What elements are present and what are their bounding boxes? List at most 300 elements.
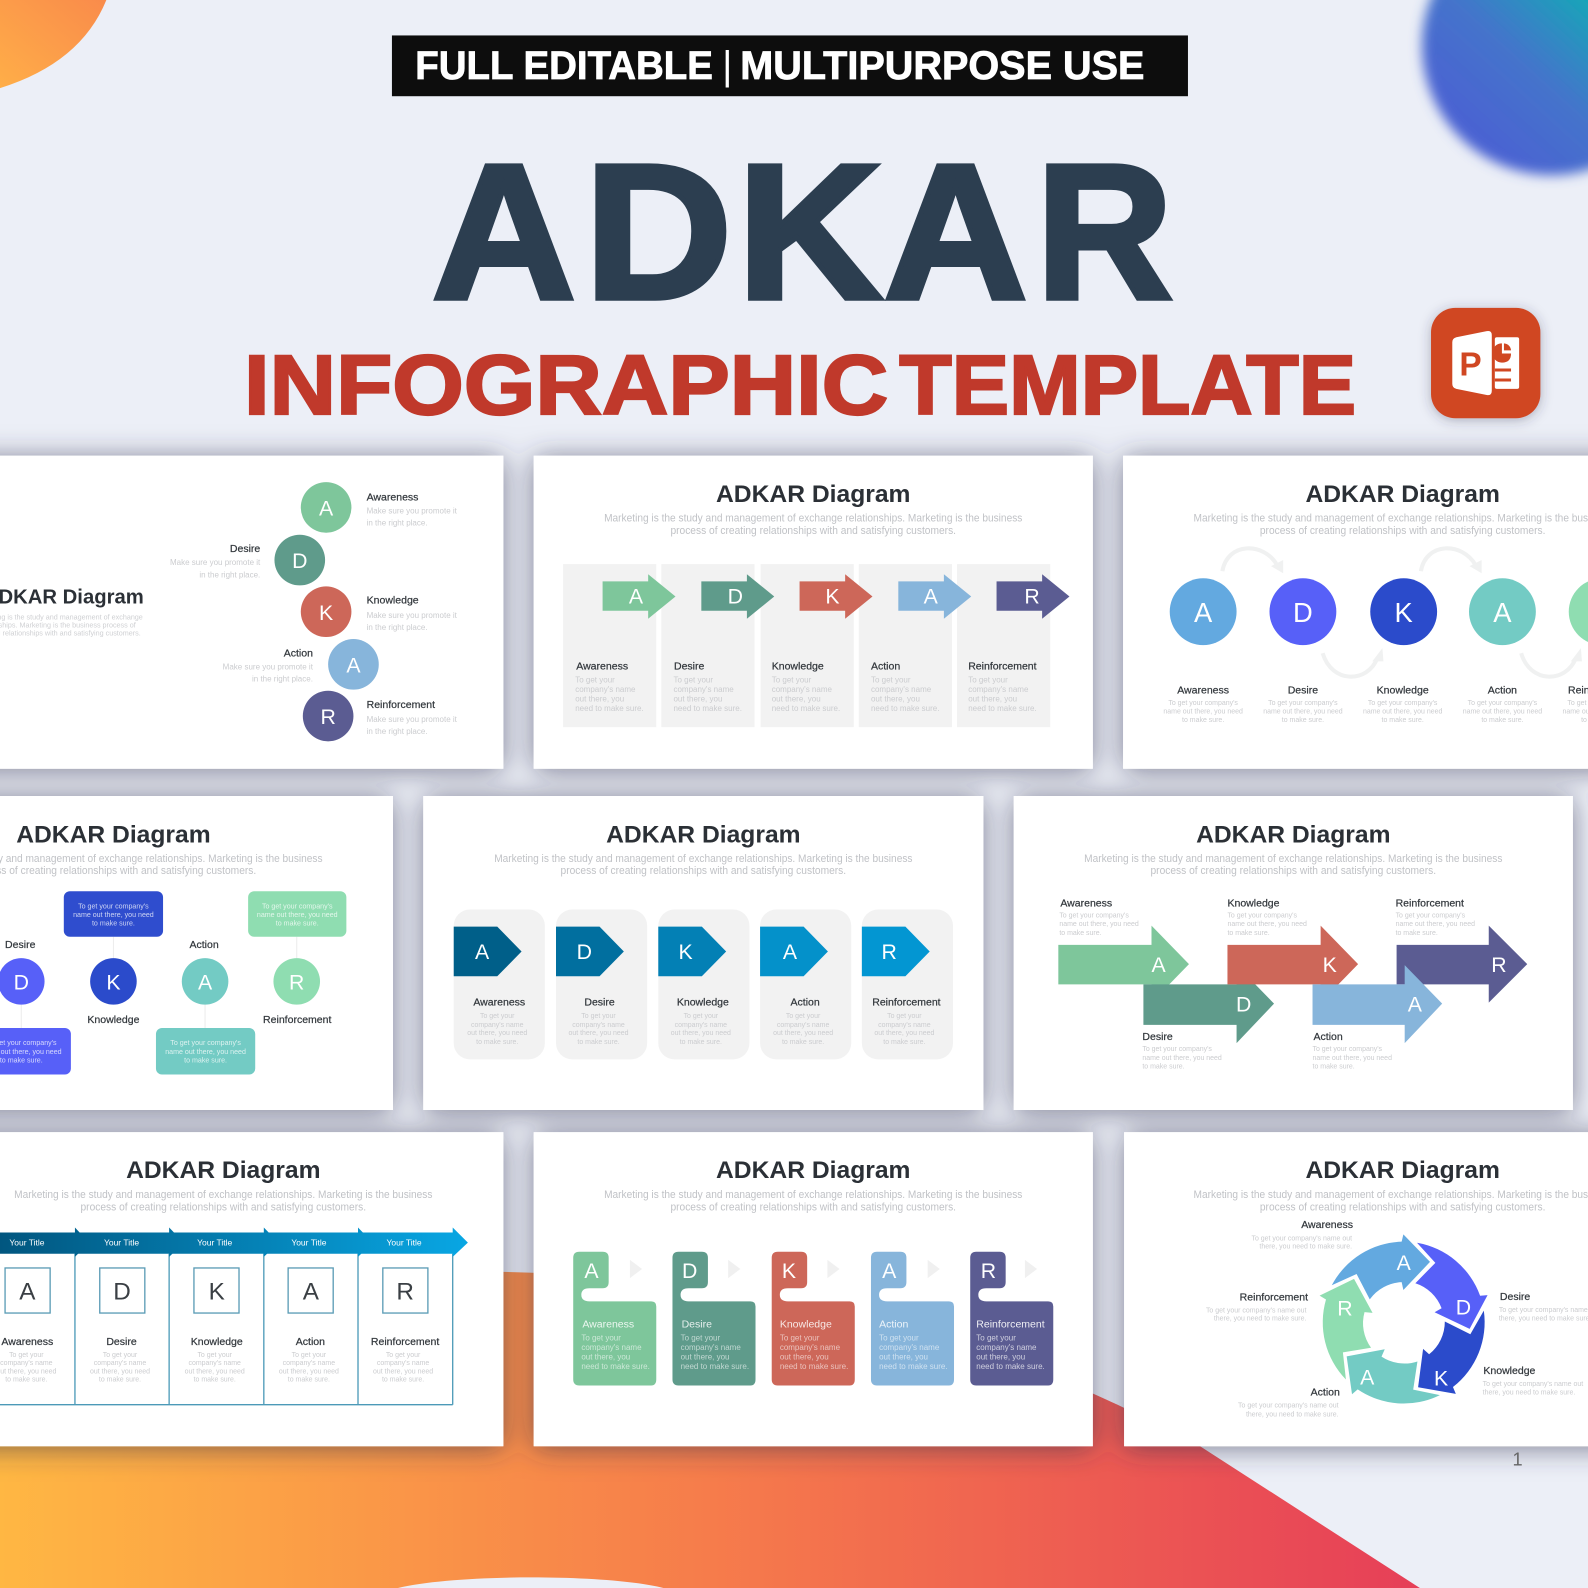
column text Awareness: To get your: [575, 676, 615, 685]
intro text: Marketing is the study and management of exchange relationships. Marketing is the business: [494, 853, 912, 865]
label Desire: [1499, 1291, 1588, 1323]
label Knowledge: Knowledge: [1377, 685, 1429, 697]
tabbed card D: D: [682, 1259, 697, 1283]
card text Action: to make sure.: [782, 1039, 824, 1046]
column text Awareness: [575, 660, 644, 713]
column text Action: need to make sure.: [871, 704, 939, 713]
tabbed card D: Desire: [682, 1319, 712, 1331]
label Action: Action: [1311, 1387, 1340, 1399]
column text Knowledge: Knowledge: [191, 1336, 243, 1348]
column text Awareness: need to make sure.: [575, 704, 644, 713]
arrow A: [603, 574, 676, 619]
tabbed card D: To get your: [681, 1333, 720, 1342]
letter box K: [194, 1268, 239, 1313]
label Action: there, you need to make sure.: [1246, 1412, 1339, 1419]
label Desire: Make sure you promote it: [170, 558, 261, 567]
header arrow 4: [263, 1227, 373, 1257]
letter box D: D: [113, 1278, 131, 1305]
column text Knowledge: out there, you: [772, 694, 821, 703]
slide shadows: [0, 456, 1588, 1446]
label Knowledge: Make sure you promote it: [367, 611, 458, 620]
intro text: process of creating relationships with and satisfying customers.: [1260, 1202, 1545, 1214]
circle A: A: [198, 970, 213, 994]
main title: A: [884, 124, 1027, 339]
tabbed card A: Action: [879, 1319, 908, 1331]
circle K: K: [319, 601, 333, 625]
column text Action: out there, you need: [279, 1368, 339, 1375]
arrow A: A: [1408, 993, 1423, 1017]
tabbed card R: company's name: [976, 1343, 1037, 1352]
tabbed card A: To get your: [581, 1333, 621, 1342]
decorative blue blurred circle: [1422, 0, 1588, 175]
circle A: A: [319, 496, 334, 520]
ring arrow A: [1330, 1326, 1448, 1436]
note box Reinforcement: [248, 891, 346, 937]
panel: interlocking arrows slide: [1014, 796, 1573, 1110]
tabbed card R: [970, 1252, 1053, 1385]
card text Knowledge: To get your: [684, 1013, 719, 1020]
label Desire: Desire: [1500, 1291, 1530, 1303]
intro text: process of creating relationships with and satisfying customers.: [561, 865, 846, 877]
tabbed card A: company's name: [879, 1343, 940, 1352]
tabbed card A: [871, 1252, 954, 1385]
ring arrow A: [1332, 1234, 1430, 1299]
intro text: [1084, 853, 1502, 877]
label Awareness: To get your company's: [1059, 913, 1129, 920]
ring arrow D: [1404, 1227, 1496, 1341]
pentagon A: [454, 927, 522, 976]
column text Awareness: company's name: [0, 1360, 53, 1367]
note box Reinforcement: to make sure.: [276, 920, 319, 928]
label Knowledge: to make sure.: [1382, 717, 1424, 724]
card text Desire: company's name: [572, 1022, 625, 1029]
column text Desire: Desire: [674, 660, 705, 672]
label Reinforcement: to make sure.: [1396, 930, 1438, 937]
label Action: to make sure.: [1481, 717, 1524, 724]
panel: cycle ring slide: [1124, 1132, 1588, 1446]
column text Awareness: Awareness: [1, 1336, 53, 1348]
note box Knowledge: [64, 891, 163, 937]
table lines: [0, 1254, 453, 1405]
column text Desire: [90, 1336, 150, 1383]
subtitle: [244, 338, 1356, 432]
pentagon A: A: [475, 940, 490, 964]
label Desire: [170, 543, 261, 579]
column text Desire: Desire: [106, 1336, 137, 1348]
column text Reinforcement: to make sure.: [382, 1376, 424, 1383]
tabbed card K: need to make sure.: [780, 1362, 848, 1371]
panel: header arrows table slide: [0, 1132, 503, 1446]
subtitle: TEMPLATE: [899, 338, 1356, 432]
card text Awareness: To get your: [480, 1013, 515, 1020]
cards: [454, 909, 953, 1059]
letter box D: [100, 1268, 145, 1313]
label Knowledge: To get your company's: [1368, 700, 1438, 707]
label Awareness: To get your company's name out: [1252, 1236, 1352, 1243]
card text Desire: To get your: [581, 1013, 616, 1020]
badge: full editable: [392, 35, 1188, 96]
arrow K: [800, 574, 872, 619]
tabbed card A: out there, you: [581, 1353, 630, 1362]
label Reinforcement: [1206, 1291, 1308, 1323]
cycle diagram: [1297, 1227, 1514, 1436]
label Awareness: to make sure.: [1182, 717, 1224, 724]
label Knowledge: To get your company's name out: [1483, 1381, 1583, 1388]
circle D: [274, 535, 325, 585]
labels: [5, 939, 332, 1026]
header arrow 2: [75, 1227, 184, 1257]
label Knowledge: [1483, 1365, 1583, 1396]
column text Desire: out there, you: [673, 694, 722, 703]
label Reinforcement: Reinforcement: [1396, 897, 1464, 909]
label Desire: [1263, 685, 1343, 724]
tabbed card A: need to make sure.: [581, 1362, 650, 1371]
ring letters: D: [1456, 1296, 1471, 1320]
label Desire: [1142, 1031, 1222, 1070]
labels: Desire: [5, 939, 36, 951]
card text Reinforcement: To get your: [887, 1013, 922, 1020]
column text Knowledge: To get your: [772, 676, 812, 685]
card text Reinforcement: company's name: [878, 1022, 931, 1029]
letter box R: [383, 1268, 428, 1313]
circle D: D: [14, 970, 29, 994]
card text Desire: Desire: [584, 997, 615, 1009]
label Reinforcement: name out there, you need: [1396, 921, 1475, 928]
card text Knowledge: Knowledge: [677, 997, 729, 1009]
pentagon R: R: [882, 940, 897, 964]
column text Knowledge: need to make sure.: [772, 704, 840, 713]
column text Knowledge: company's name: [772, 685, 832, 694]
intro text: Marketing is the study and management of exchange relationships. Marketing is the business: [604, 513, 1022, 525]
ring letters: [1337, 1251, 1471, 1390]
arrow A: [898, 574, 971, 619]
label Desire: Desire: [1142, 1031, 1173, 1043]
column text Knowledge: To get your: [197, 1352, 233, 1359]
tabbed card R: To get your: [976, 1333, 1016, 1342]
arrow R: [1397, 926, 1527, 1003]
label Action: To get your company's: [1313, 1046, 1383, 1053]
circle K: [301, 586, 351, 637]
column text Desire: company's name: [94, 1360, 146, 1367]
panel: column arrows slide: [534, 456, 1093, 769]
intro text: process of creating relationships with and satisfying customers.: [670, 525, 956, 537]
arrow A: [1313, 965, 1442, 1043]
column text Desire: [673, 660, 742, 713]
circle A: A: [1493, 597, 1512, 628]
heading: ADKAR Diagram: [16, 821, 211, 848]
card text Awareness: to make sure.: [476, 1039, 518, 1046]
main title: [432, 124, 1173, 339]
note box Knowledge: name out there, you need: [73, 911, 154, 919]
icon: PowerPoint: P: [1459, 347, 1482, 384]
tabbed card K: To get your: [780, 1333, 820, 1342]
label Awareness: To get your company's: [1168, 700, 1238, 707]
column text Reinforcement: To get your: [968, 676, 1008, 685]
label Reinforcement: [367, 699, 458, 736]
circle R: R: [289, 970, 304, 994]
panel: vertical circles slide: [0, 456, 503, 769]
column text Action: To get your: [871, 676, 911, 685]
arrow K: [1227, 926, 1358, 1003]
badge: full editable: |: [722, 44, 732, 88]
label Desire: Desire: [1288, 685, 1318, 697]
tabbed card A: company's name: [581, 1343, 642, 1352]
label Knowledge: to make sure.: [1227, 930, 1270, 937]
label Knowledge: name out there, you need: [1363, 708, 1442, 715]
label Knowledge: name out there, you need: [1227, 921, 1307, 928]
arrow K: K: [1323, 953, 1337, 977]
card text Action: out there, you need: [773, 1030, 833, 1037]
intro text: Marketing is the study and management of exchange relationships. Marketing is the business: [604, 1189, 1022, 1201]
column text Knowledge: company's name: [188, 1360, 241, 1367]
label Awareness: [1163, 685, 1243, 724]
intro text: process of creating relationships with and satisfying customers.: [670, 1202, 956, 1214]
arrow A: A: [629, 585, 644, 609]
labels: Reinforcement: [263, 1014, 332, 1026]
card text Desire: to make sure.: [577, 1039, 620, 1046]
note box Action: name out there, you need: [165, 1048, 246, 1056]
label Knowledge: To get your company's: [1227, 913, 1297, 920]
label Reinforcement: [1562, 685, 1588, 724]
main title: A: [432, 124, 576, 339]
column text Awareness: Awareness: [576, 660, 628, 672]
pentagon D: [556, 927, 624, 976]
tabbed card D: need to make sure.: [681, 1362, 749, 1371]
label Action: Action: [284, 647, 313, 659]
tabbed card K: K: [782, 1259, 796, 1283]
tabbed card A: A: [882, 1259, 897, 1283]
label Desire: to make sure.: [1142, 1063, 1185, 1070]
label Awareness: to make sure.: [1059, 930, 1102, 937]
column text Action: [279, 1336, 339, 1383]
arrow A: A: [1151, 953, 1166, 977]
heading: ADKAR Diagram: [716, 1157, 910, 1184]
label Reinforcement: Reinforcement: [367, 699, 435, 711]
column text Knowledge: to make sure.: [194, 1376, 236, 1383]
heading: ADKAR Diagram: [126, 1157, 321, 1184]
card text Desire: out there, you need: [569, 1030, 629, 1037]
column text Awareness: out there, you: [575, 694, 624, 703]
tabbed card A: [573, 1252, 656, 1385]
label Action: To get your company's name out: [1238, 1403, 1339, 1410]
panel: circles with curved arrows slide: [1123, 456, 1588, 769]
arrow D: D: [728, 585, 743, 609]
label Awareness: [1252, 1219, 1353, 1251]
heading: ADKAR Diagram: [1305, 481, 1500, 508]
circle D: [0, 958, 45, 1005]
column backgrounds: [563, 564, 1050, 727]
circle K: K: [106, 970, 121, 994]
labels: Knowledge: [87, 1014, 140, 1026]
column text Action: [871, 660, 939, 713]
icon: PowerPoint: [1431, 308, 1540, 418]
note box Action: [156, 1028, 255, 1075]
circle A: [1170, 578, 1237, 645]
pentagon A: A: [783, 940, 798, 964]
column text Action: company's name: [283, 1360, 335, 1367]
column text Desire: To get your: [673, 676, 713, 685]
letter box K: K: [209, 1278, 225, 1305]
label Action: to make sure.: [1313, 1063, 1355, 1070]
column text Knowledge: [772, 660, 840, 713]
intro text: Marketing is the study and management of exchange relationships. Marketing is the business: [1084, 853, 1502, 865]
letter box A: [5, 1268, 50, 1313]
column text Reinforcement: company's name: [377, 1360, 429, 1367]
label Desire: in the right place.: [199, 570, 260, 579]
ring letters: A: [1397, 1251, 1412, 1275]
tabbed card K: [772, 1252, 855, 1385]
label Action: name out there, you need: [1463, 708, 1542, 715]
column text Desire: To get your: [103, 1352, 138, 1359]
tabbed card D: out there, you: [681, 1353, 729, 1362]
heading: ADKAR Diagram: [1305, 1157, 1500, 1184]
card text Reinforcement: out there, you need: [874, 1030, 935, 1037]
letter box A: A: [303, 1278, 320, 1305]
decorative orange corner shape: [0, 0, 106, 88]
ring arrow R: [1297, 1270, 1390, 1384]
ring letters: A: [1360, 1365, 1375, 1389]
column text Action: Action: [296, 1336, 325, 1348]
arrow D: [701, 574, 774, 619]
subtitle: INFOGRAPHIC: [244, 338, 888, 432]
note box Desire: to make sure.: [0, 1056, 43, 1064]
column text Action: company's name: [871, 685, 932, 694]
intro text: [494, 853, 912, 877]
column text Desire: to make sure.: [99, 1376, 141, 1383]
column text Desire: need to make sure.: [673, 704, 742, 713]
card text Reinforcement: [872, 997, 941, 1046]
label Reinforcement: To get your company's: [1396, 913, 1466, 920]
note box Reinforcement: name out there, you need: [257, 911, 338, 919]
pentagon R: [862, 927, 930, 976]
pentagon K: [658, 927, 726, 976]
label Awareness: in the right place.: [367, 519, 428, 528]
label Knowledge: [1363, 685, 1442, 724]
column text Knowledge: out there, you need: [185, 1368, 245, 1375]
label Action: name out there, you need: [1313, 1055, 1392, 1062]
note box Desire: [0, 1028, 71, 1075]
circle R: [303, 691, 353, 741]
column text Reinforcement: company's name: [968, 685, 1029, 694]
column text Desire: company's name: [673, 685, 734, 694]
note box Action: to make sure.: [184, 1056, 227, 1064]
label Knowledge: [367, 595, 458, 632]
label Action: Action: [1488, 685, 1517, 697]
column text Action: to make sure.: [288, 1376, 330, 1383]
card text Desire: [569, 997, 629, 1046]
circle A: [301, 482, 351, 533]
label Knowledge: in the right place.: [367, 623, 428, 632]
column text Reinforcement: need to make sure.: [968, 704, 1037, 713]
connector lines: [21, 937, 297, 1028]
tabbed card A: To get your: [879, 1333, 919, 1342]
label Awareness: Make sure you promote it: [367, 506, 458, 515]
label Awareness: Awareness: [1177, 685, 1229, 697]
card text Action: To get your: [786, 1013, 821, 1020]
column text Desire: out there, you need: [90, 1368, 150, 1375]
main title: K: [737, 124, 882, 339]
label Awareness: [1059, 897, 1139, 937]
note box Reinforcement: To get your company's: [262, 902, 333, 910]
main title: D: [584, 124, 732, 339]
circle D: [1269, 578, 1336, 645]
curved connector arrows: [1222, 548, 1582, 677]
card text Reinforcement: to make sure.: [883, 1039, 926, 1046]
circle D: D: [1293, 597, 1313, 628]
label Reinforcement: Make sure you promote it: [367, 715, 458, 724]
heading: ADKAR Diagram: [716, 481, 910, 508]
note box Knowledge: to make sure.: [92, 920, 135, 928]
label Awareness: Awareness: [1301, 1219, 1353, 1231]
label Reinforcement: To get your company's name out: [1206, 1308, 1307, 1315]
card text Knowledge: to make sure.: [680, 1039, 722, 1046]
tabbed card D: company's name: [681, 1343, 741, 1352]
circle A: A: [346, 653, 361, 677]
main title: R: [1036, 124, 1173, 339]
card text Action: Action: [791, 997, 820, 1009]
ring arrow K: [1396, 1299, 1514, 1410]
column text Reinforcement: To get your: [386, 1352, 421, 1359]
circle A: [328, 639, 379, 690]
header arrow 1: Your Title: [9, 1238, 45, 1248]
card text Knowledge: [671, 997, 731, 1046]
letter box R: R: [396, 1278, 414, 1305]
label Knowledge: Knowledge: [1483, 1365, 1536, 1377]
arrow A: [1058, 926, 1189, 1003]
label Desire: To get your company's: [1142, 1046, 1212, 1053]
pentagon D: D: [577, 940, 592, 964]
label Awareness: Awareness: [1060, 897, 1112, 909]
badge: full editable: MULTIPURPOSE USE: [740, 44, 1144, 88]
card text Reinforcement: Reinforcement: [872, 997, 941, 1009]
label Desire: To get your company's: [1268, 700, 1338, 707]
arrow R: [997, 574, 1069, 619]
header arrow 4: Your Title: [291, 1238, 327, 1248]
panel: pentagon cards slide: [423, 796, 983, 1110]
circle K: [90, 958, 137, 1005]
header arrow 3: [169, 1227, 279, 1257]
label Knowledge: [1227, 897, 1307, 937]
intro text: Marketing is the study and management of exchange relationships. Marketing is the business: [14, 1189, 432, 1201]
intro text: process of creating relationships with and satisfying customers.: [81, 1202, 366, 1214]
tabbed card R: R: [981, 1259, 996, 1283]
bottom gradient wave: [0, 1270, 1420, 1588]
card text Knowledge: company's name: [675, 1022, 727, 1029]
label Reinforcement: [1396, 897, 1475, 937]
tabbed card A: out there, you: [879, 1353, 928, 1362]
header arrow 5: [358, 1227, 468, 1257]
tabbed card K: Knowledge: [780, 1319, 832, 1331]
letter box A: [288, 1268, 333, 1313]
label Desire: name out there, you need: [1142, 1055, 1222, 1062]
column text Reinforcement: Reinforcement: [371, 1336, 439, 1348]
card text Knowledge: out there, you need: [671, 1030, 731, 1037]
circle R: [273, 958, 320, 1005]
column text Reinforcement: [371, 1336, 439, 1383]
panel: tree of circles slide: [0, 796, 393, 1110]
column text Reinforcement: Reinforcement: [968, 660, 1037, 672]
column text Knowledge: Knowledge: [772, 660, 824, 672]
tabbed card R: out there, you: [976, 1353, 1025, 1362]
panel: tabbed cards slide: [534, 1132, 1093, 1446]
tabbed card K: out there, you: [780, 1353, 829, 1362]
labels: Action: [189, 939, 219, 951]
label Action: [1463, 685, 1542, 724]
label Reinforcement: Reinforcement: [1240, 1291, 1308, 1303]
tabbed card R: need to make sure.: [976, 1362, 1045, 1371]
intro text: process of creating relationships with and satisfying customers.: [1260, 525, 1545, 537]
label Desire: name out there, you need: [1263, 708, 1343, 715]
